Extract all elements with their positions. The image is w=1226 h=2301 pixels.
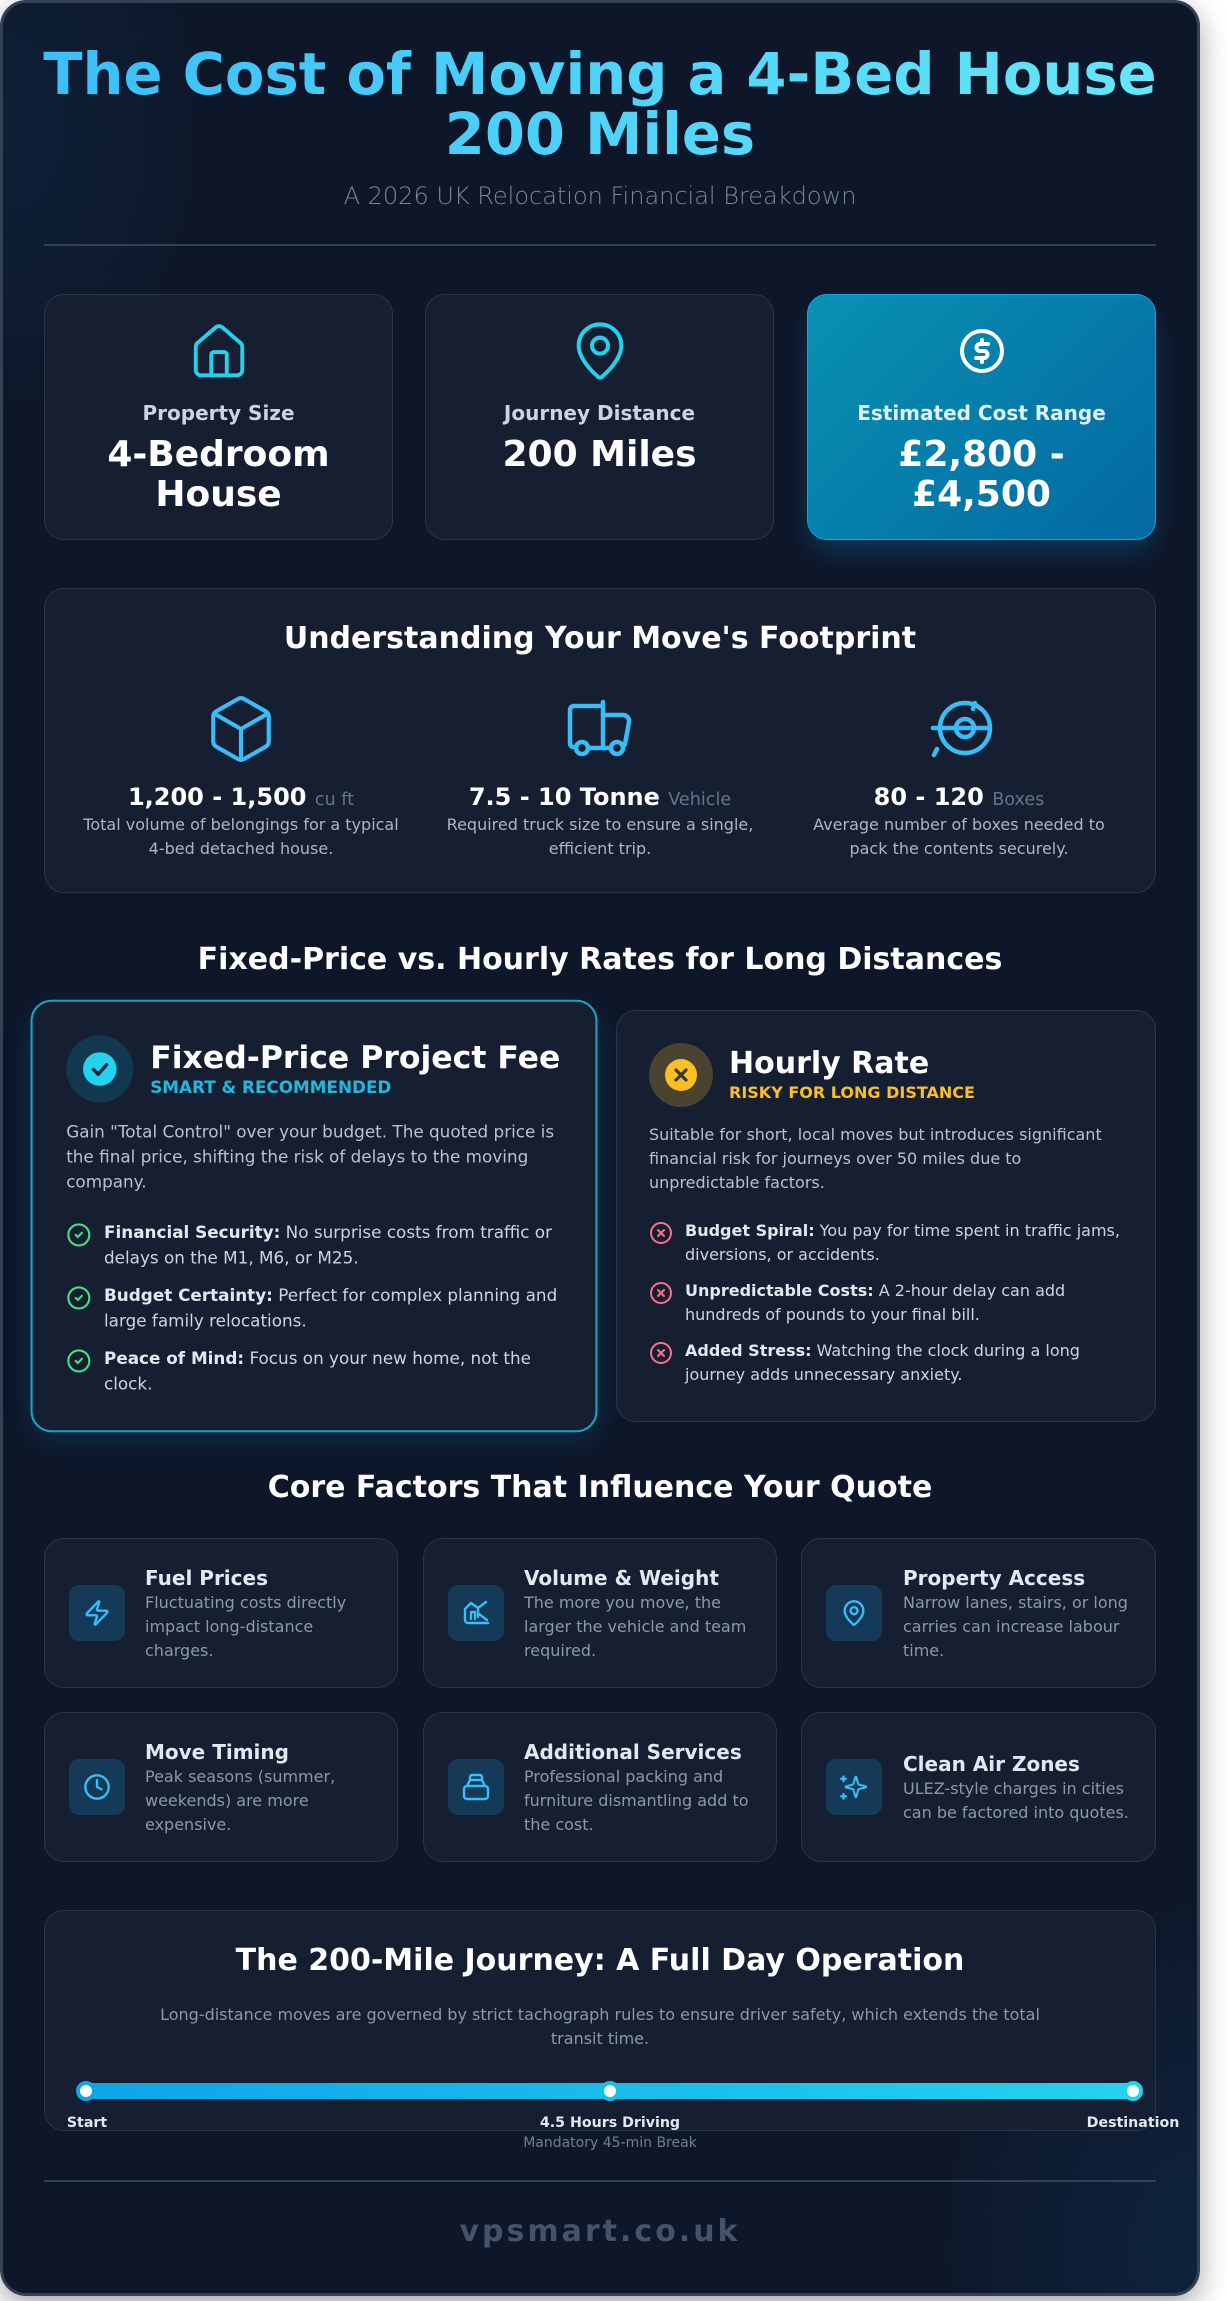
factor text: impact long-distance	[145, 1617, 313, 1636]
description: transit time.	[551, 2029, 649, 2048]
icon: sparkles	[826, 1759, 882, 1815]
description: efficient trip.	[549, 839, 651, 858]
factor text: The more you move, the	[524, 1593, 721, 1612]
factor text	[903, 1752, 1129, 1822]
factor text: expensive.	[145, 1815, 231, 1834]
factor text: Volume & Weight	[524, 1566, 719, 1590]
factor text: Peak seasons (summer,	[145, 1767, 335, 1786]
icon: check badge	[66, 1035, 133, 1103]
factor text: Additional Services	[524, 1740, 742, 1764]
factor card: property access	[801, 1538, 1156, 1688]
description	[649, 1125, 1102, 1192]
label: mandatory break: Mandatory 45-min Break	[523, 2135, 697, 2151]
stat card: property size	[44, 294, 393, 540]
factor card: volume and weight	[423, 1538, 777, 1688]
heading: Understanding Your Move's Footprint	[284, 621, 916, 656]
list item: hundreds of pounds to your final bill.	[685, 1305, 980, 1324]
factor text: Fluctuating costs directly	[145, 1593, 346, 1612]
node: break	[600, 2081, 620, 2101]
title: 200 Miles	[445, 101, 755, 168]
progress bar	[86, 2083, 1133, 2099]
label: start: Start	[67, 2115, 107, 2131]
list item: Budget Spiral: You pay for time spent in traffic jams,	[685, 1221, 1120, 1240]
label: driving: 4.5 Hours Driving	[540, 2115, 680, 2131]
description: the final price, shifting the risk of delays to the moving	[66, 1147, 528, 1167]
title: The Cost of Moving a 4-Bed House	[43, 41, 1157, 108]
factor text: ULEZ-style charges in cities	[903, 1779, 1124, 1798]
factor text	[145, 1566, 346, 1660]
footer brand: vpsmart.co.uk	[459, 2214, 741, 2249]
factor text: Narrow lanes, stairs, or long	[903, 1593, 1128, 1612]
icon: clock	[69, 1759, 125, 1815]
badge label: RISKY FOR LONG DISTANCE	[729, 1083, 975, 1102]
heading: core factors: Core Factors That Influence Your Quote	[268, 1470, 932, 1505]
value: 200 Miles	[502, 434, 697, 475]
factor text: furniture dismantling add to	[524, 1791, 749, 1810]
factor text: time.	[903, 1641, 944, 1660]
list item	[67, 1222, 552, 1267]
description	[447, 815, 753, 858]
factor text	[524, 1566, 746, 1660]
panel: journey	[44, 1910, 1156, 2131]
icon: zap	[69, 1585, 125, 1641]
list item: diversions, or accidents.	[685, 1245, 880, 1264]
heading: The 200-Mile Journey: A Full Day Operation	[236, 1943, 964, 1978]
factor text: Professional packing and	[524, 1767, 723, 1786]
description: financial risk for journeys over 50 miles due to	[649, 1149, 1021, 1168]
factor card: clean air zones	[801, 1712, 1156, 1862]
factor card: additional services	[423, 1712, 777, 1862]
list item: Financial Security: No surprise costs from traffic or	[104, 1222, 552, 1242]
list item: journey adds unnecessary anxiety.	[685, 1365, 963, 1384]
stat: boxes	[813, 783, 1105, 858]
factor text: carries can increase labour	[903, 1617, 1119, 1636]
value: House	[155, 474, 282, 515]
description: Suitable for short, local moves but introduces significant	[649, 1125, 1102, 1144]
list item: Unpredictable Costs: A 2-hour delay can add	[685, 1281, 1065, 1300]
description	[813, 815, 1105, 858]
node: destination	[1123, 2081, 1143, 2101]
label: Estimated Cost Range	[857, 401, 1106, 425]
badge label: SMART & RECOMMENDED	[150, 1077, 391, 1097]
list item: large family relocations.	[104, 1310, 307, 1330]
node: start	[76, 2081, 96, 2101]
description	[66, 1122, 554, 1192]
list item: delays on the M1, M6, or M25.	[104, 1248, 359, 1267]
value: £2,800 -	[898, 434, 1065, 475]
stat: truck size	[447, 783, 753, 858]
heading: fixed vs hourly: Fixed-Price vs. Hourly Rates for Long Distances	[198, 942, 1002, 977]
figure: 80 - 120 Boxes	[874, 783, 1044, 811]
list item	[67, 1348, 531, 1393]
value	[107, 434, 330, 515]
stat card: journey distance	[425, 294, 774, 540]
icon: map pin	[576, 322, 624, 380]
icon: truck	[568, 700, 632, 756]
description: Gain "Total Control" over your budget. The quoted price is	[66, 1122, 554, 1141]
list item	[650, 1341, 1080, 1384]
factor card: move timing	[44, 1712, 398, 1862]
description: company.	[66, 1172, 147, 1192]
list item	[650, 1221, 1120, 1264]
panel: fixed-price fee	[30, 1000, 598, 1432]
stat: volume	[83, 783, 399, 858]
card title: Hourly Rate	[729, 1046, 929, 1081]
list item: Added Stress: Watching the clock during a long	[685, 1341, 1080, 1360]
panel: hourly rate	[616, 1010, 1156, 1422]
icon: package	[448, 1759, 504, 1815]
figure: 7.5 - 10 Tonne Vehicle	[469, 783, 731, 811]
label: Journey Distance	[504, 401, 695, 425]
title	[0, 45, 1200, 165]
timeline	[67, 2081, 1179, 2151]
factor text: required.	[524, 1641, 596, 1660]
icon: dollar circle	[960, 329, 1004, 373]
description: Long-distance moves are governed by strict tachograph rules to ensure driver safety, which extends the total	[160, 2005, 1040, 2024]
icon: pin	[826, 1585, 882, 1641]
figure: 1,200 - 1,500 cu ft	[128, 783, 354, 811]
list item	[650, 1281, 1065, 1324]
list item: clock.	[104, 1374, 152, 1393]
factor text: can be factored into quotes.	[903, 1803, 1129, 1822]
description	[160, 2005, 1040, 2048]
factor text	[903, 1566, 1128, 1660]
subtitle: A 2026 UK Relocation Financial Breakdown	[344, 182, 856, 210]
factor text: Move Timing	[145, 1740, 289, 1764]
icon: target	[930, 700, 992, 758]
factor text: Fuel Prices	[145, 1566, 268, 1590]
description	[83, 815, 399, 858]
list item	[67, 1285, 557, 1330]
icon: box	[211, 696, 271, 762]
value: £4,500	[912, 474, 1051, 515]
factor card: fuel prices	[44, 1538, 398, 1688]
factor text: larger the vehicle and team	[524, 1617, 746, 1636]
panel: footprint	[44, 588, 1156, 893]
factor text: Clean Air Zones	[903, 1752, 1080, 1776]
factor text	[524, 1740, 749, 1834]
factor text: charges.	[145, 1641, 213, 1660]
value: 4-Bedroom	[107, 434, 330, 475]
value	[898, 434, 1065, 515]
factor text	[145, 1740, 335, 1834]
icon: volume	[448, 1585, 504, 1641]
list item: Budget Certainty: Perfect for complex planning and	[104, 1285, 557, 1305]
description: Required truck size to ensure a single,	[447, 815, 753, 834]
label: destination: Destination	[1087, 2115, 1179, 2131]
stat card: estimated cost range	[807, 294, 1156, 540]
factor text: Property Access	[903, 1566, 1085, 1590]
icon: warning badge	[649, 1043, 713, 1107]
list item: Peace of Mind: Focus on your new home, not the	[104, 1348, 531, 1368]
description: Average number of boxes needed to	[813, 815, 1105, 834]
description: 4-bed detached house.	[149, 839, 333, 858]
card title: Fixed-Price Project Fee	[150, 1040, 560, 1076]
description: unpredictable factors.	[649, 1173, 825, 1192]
factor text: the cost.	[524, 1815, 594, 1834]
factor text: weekends) are more	[145, 1791, 309, 1810]
description: Total volume of belongings for a typical	[83, 815, 399, 834]
label: Property Size	[142, 401, 295, 425]
description: pack the contents securely.	[849, 839, 1069, 858]
icon: house	[194, 324, 244, 378]
